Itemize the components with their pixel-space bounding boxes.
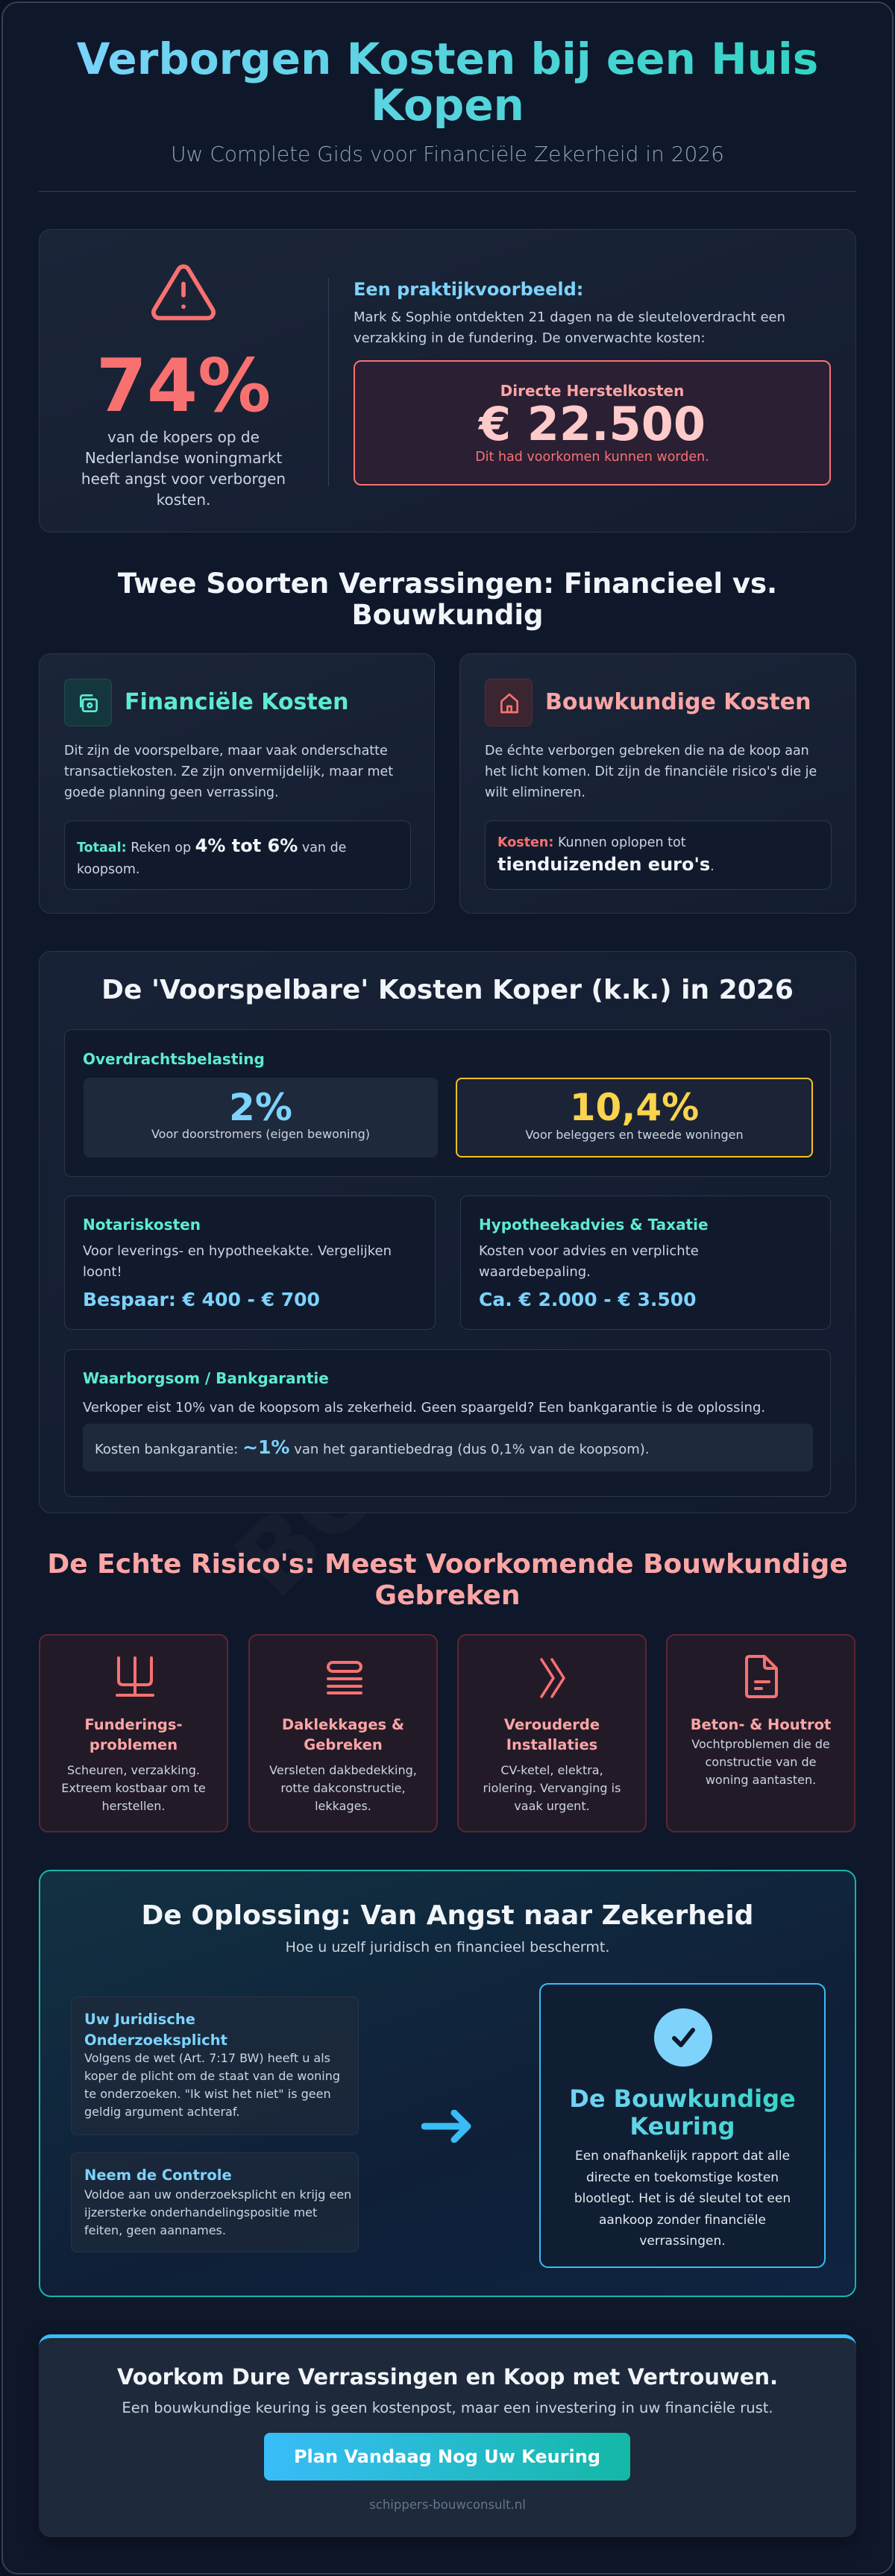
box: inspection bbox=[539, 1983, 826, 2268]
button: Plan Vandaag Nog Uw Keuring bbox=[294, 2446, 600, 2467]
icon: check bbox=[654, 2008, 712, 2067]
card: roof bbox=[248, 1634, 438, 1832]
stat number: 74% bbox=[96, 344, 271, 429]
subtitle: Uw Complete Gids voor Financiële Zekerheid in 2026 bbox=[171, 142, 724, 166]
box: take control: Voldoe aan uw onderzoeksplicht en krijg een ijzersterke onderhandelingspositie met feiten, geen aannames. bbox=[84, 2187, 351, 2237]
icon: document bbox=[745, 1655, 778, 1698]
box: mortgage: Hypotheekadvies & Taxatie bbox=[479, 1216, 709, 1234]
text: Dit zijn de voorspelbare, maar vaak onderschatte transactiekosten. Ze zijn onvermijdelijk, maar met goede planning geen verrassing. bbox=[64, 744, 393, 800]
box: mortgage: Kosten voor advies en verplichte waardebepaling. bbox=[479, 1243, 699, 1280]
panel: structural bbox=[459, 653, 856, 914]
heading: two types: Twee Soorten Verrassingen: Financieel vs. Bouwkundig bbox=[118, 568, 777, 631]
card: roof: Daklekkages & bbox=[282, 1716, 404, 1733]
total box bbox=[64, 820, 411, 890]
stat 2%: Voor doorstromers (eigen bewoning) bbox=[151, 1127, 370, 1141]
icon: money bbox=[64, 679, 112, 726]
stat 10,4%: Voor beleggers en tweede woningen bbox=[525, 1128, 744, 1142]
panel: CTA bbox=[39, 2334, 856, 2537]
icon: warning bbox=[151, 264, 216, 321]
title: Financiële Kosten bbox=[125, 689, 348, 715]
box: inspection: Keuring bbox=[629, 2112, 735, 2140]
stat 10,4%: 10,4% bbox=[570, 1086, 699, 1129]
icon: foundation bbox=[116, 1656, 154, 1697]
stat 10,4% bbox=[456, 1078, 813, 1157]
card: roof: Gebreken bbox=[304, 1736, 383, 1753]
stat 2%: 2% bbox=[229, 1086, 292, 1129]
cost callout: Dit had voorkomen kunnen worden. bbox=[475, 450, 709, 465]
box: inspection: Een onafhankelijk rapport dat alle directe en toekomstige kosten blootlegt. Het is dé sleutel tot een aankoop zonder financiële verrassingen. bbox=[574, 2149, 791, 2249]
box: notary: Bespaar: € 400 - € 700 bbox=[83, 1289, 320, 1310]
example heading: Een praktijkvoorbeeld: bbox=[354, 279, 583, 300]
watermark: BOUWCONSULT bbox=[213, 946, 885, 1618]
title: Bouwkundige Kosten bbox=[545, 689, 811, 715]
url: schippers-bouwconsult.nl bbox=[369, 2498, 526, 2512]
panel: solution bbox=[39, 1870, 856, 2297]
card: foundation bbox=[39, 1634, 228, 1832]
panel: financial bbox=[39, 653, 435, 914]
card: installations bbox=[457, 1634, 647, 1832]
card: installations: Verouderde bbox=[504, 1716, 600, 1733]
box: mortgage: Ca. € 2.000 - € 3.500 bbox=[479, 1289, 697, 1310]
title: Verborgen Kosten bij een Huis Kopen bbox=[77, 34, 818, 131]
card: rot bbox=[666, 1634, 855, 1832]
box: inspection: De Bouwkundige bbox=[569, 2085, 796, 2113]
card: foundation: Funderings- bbox=[84, 1716, 183, 1733]
cost box: Kosten: Kunnen oplopen tot tienduizenden euro's. bbox=[497, 835, 715, 875]
box: legal duty: Volgens de wet (Art. 7:17 BW) heeft u als koper de plicht om de staat van de woning te onderzoeken. "Ik wist het niet" is geen geldig argument achteraf. bbox=[84, 2051, 340, 2119]
cost callout: € 22.500 bbox=[479, 397, 706, 451]
box: transfer tax: Overdrachtsbelasting bbox=[83, 1050, 265, 1068]
box: deposit: Waarborgsom / Bankgarantie bbox=[83, 1369, 329, 1387]
stat 2% bbox=[84, 1078, 438, 1157]
card: roof: Versleten dakbedekking, rotte dakconstructie, lekkages. bbox=[269, 1763, 417, 1813]
box: take control: Neem de Controle bbox=[84, 2167, 232, 2184]
watermark: SCHIPPERS bbox=[182, 980, 694, 1492]
title: De Oplossing: Van Angst naar Zekerheid bbox=[142, 1900, 753, 1931]
box: legal duty bbox=[71, 1997, 359, 2135]
box: transfer tax bbox=[64, 1029, 831, 1177]
box: mortgage bbox=[460, 1196, 831, 1330]
panel: stat bbox=[39, 229, 856, 533]
card: foundation: Scheuren, verzakking. Extreem kostbaar om te herstellen. bbox=[61, 1763, 206, 1813]
example text: Mark & Sophie ontdekten 21 dagen na de sleuteloverdracht een verzakking in de fundering. De onverwachte kosten: bbox=[354, 310, 785, 346]
heading: risks: De Echte Risico's: Meest Voorkomende Bouwkundige Gebreken bbox=[47, 1549, 848, 1611]
text: De échte verborgen gebreken die na de koop aan het licht komen. Dit zijn de financiële risico's die je wilt elimineren. bbox=[485, 744, 817, 800]
arrow bbox=[421, 2110, 471, 2143]
subtitle: Hoe u uzelf juridisch en financieel beschermt. bbox=[286, 1939, 609, 1955]
box: deposit: Verkoper eist 10% van de koopsom als zekerheid. Geen spaargeld? Een bankgarantie is de oplossing. bbox=[83, 1400, 765, 1416]
icon: house bbox=[485, 679, 533, 726]
box: take control bbox=[71, 2152, 359, 2252]
box: notary: Notariskosten bbox=[83, 1216, 201, 1234]
stat text: van de kopers op de Nederlandse woningmarkt heeft angst voor verborgen kosten. bbox=[81, 428, 286, 509]
card: installations: Installaties bbox=[506, 1736, 597, 1753]
box: notary bbox=[64, 1196, 436, 1330]
cost box bbox=[485, 820, 832, 890]
card: installations: CV-ketel, elektra, riolering. Vervanging is vaak urgent. bbox=[483, 1763, 621, 1813]
deposit note bbox=[83, 1424, 813, 1471]
box: notary: Voor leverings- en hypotheekakte. Vergelijken loont! bbox=[83, 1243, 392, 1280]
button bbox=[264, 2433, 630, 2481]
CTA text: Een bouwkundige keuring is geen kostenpost, maar een investering in uw financiële rust. bbox=[122, 2399, 773, 2416]
CTA title: Voorkom Dure Verrassingen en Koop met Vertrouwen. bbox=[117, 2364, 778, 2390]
title: De 'Voorspelbare' Kosten Koper (k.k.) in 2026 bbox=[101, 975, 794, 1005]
cost callout: Directe Herstelkosten bbox=[500, 382, 684, 400]
card: rot: Vochtproblemen die de constructie van de woning aantasten. bbox=[691, 1737, 830, 1787]
box: deposit bbox=[64, 1349, 831, 1497]
card: rot: Beton- & Houtrot bbox=[691, 1716, 831, 1733]
icon: chevrons bbox=[540, 1658, 565, 1698]
card: foundation: problemen bbox=[90, 1736, 178, 1753]
icon: roof layers bbox=[327, 1661, 362, 1694]
cost callout bbox=[354, 360, 831, 486]
total box: Totaal: Reken op 4% tot 6% van de koopsom. bbox=[77, 835, 346, 877]
panel: predictable costs bbox=[39, 951, 856, 1513]
box: legal duty: Uw Juridische Onderzoeksplicht bbox=[84, 2011, 227, 2049]
deposit note: Kosten bankgarantie: ~1% van het garantiebedrag (dus 0,1% van de koopsom). bbox=[95, 1436, 650, 1458]
